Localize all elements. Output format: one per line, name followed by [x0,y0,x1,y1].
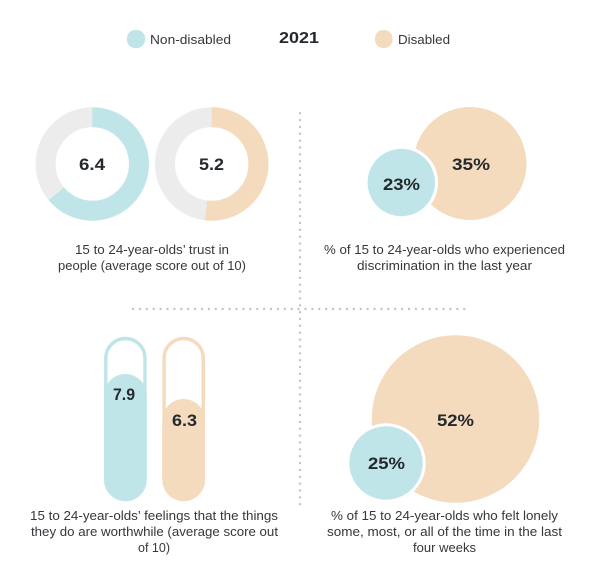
caption: discrimination: % of 15 to 24-year-olds who experienced [324,243,565,257]
caption: loneliness: some, most, or all of the time in the last [327,525,563,539]
caption: discrimination: discrimination in the last year [357,259,532,273]
donut: non-disabled trust 6.4 [46,117,139,211]
panel: discrimination [324,107,565,273]
caption: discrimination [324,243,565,273]
donut: disabled trust 5.2: 5.2 [199,155,224,174]
legend [127,30,450,48]
caption: worthwhile: they do are worthwhile (average score out [31,525,279,539]
pill: non-disabled 7.9: 7.9 [113,385,135,404]
panel: trust in people [46,117,258,273]
caption: worthwhile: 15 to 24-year-olds’ feelings that the things [30,509,278,523]
legend: non-disabled label: Non-disabled [150,33,231,47]
donut: non-disabled trust 6.4: 6.4 [79,155,106,174]
caption: trust: people (average score out of 10) [58,259,246,273]
caption: loneliness: four weeks [413,541,476,555]
circle: non-disabled 25% [349,426,423,500]
donut: disabled trust 5.2 [165,117,258,211]
pill: non-disabled 7.9 [104,338,147,501]
pill: disabled 6.3 [162,338,205,501]
legend: non-disabled swatch [127,30,145,48]
panel: worthwhile [30,338,279,555]
legend: disabled swatch [375,30,392,48]
legend: disabled label: Disabled [398,33,450,47]
circle: non-disabled 25%: 25% [368,454,405,473]
caption: trust [58,243,246,273]
circle: non-disabled 23% [368,149,435,216]
circle: disabled 35% [414,107,526,220]
panel: loneliness [327,335,563,555]
circle: disabled 35%: 35% [452,155,490,174]
circle: non-disabled 23%: 23% [383,175,420,194]
caption: worthwhile [30,509,279,555]
circle: disabled 52% [372,335,539,503]
circle: disabled 52%: 52% [437,411,474,430]
caption: worthwhile: of 10) [138,541,170,555]
caption: loneliness [327,509,563,555]
caption: trust: 15 to 24-year-olds’ trust in [75,243,229,257]
caption: loneliness: % of 15 to 24-year-olds who felt lonely [331,509,559,523]
title: 2021 [279,30,319,47]
pill: disabled 6.3: 6.3 [172,411,197,430]
